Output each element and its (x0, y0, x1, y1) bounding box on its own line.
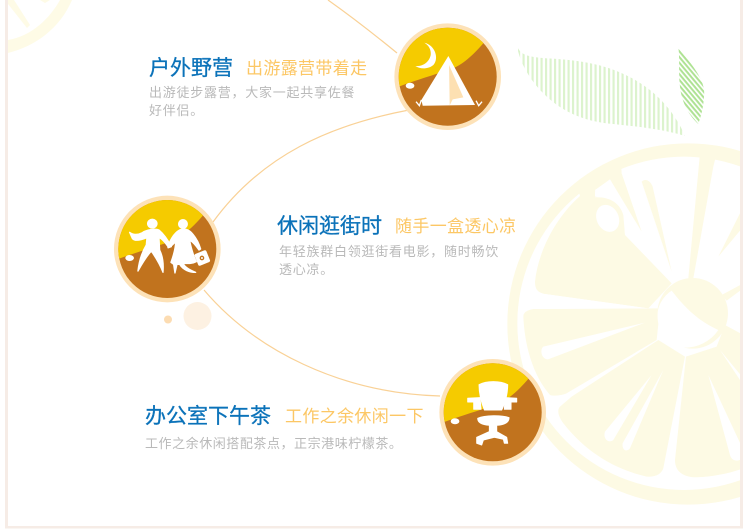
lemon fragment top left (8, 0, 72, 53)
badge: couple walking (113, 189, 223, 302)
description: leisure shopping: 透心凉。 (279, 262, 334, 277)
green striped leaf large (517, 45, 685, 136)
description: outdoor camping: 好伴侣。 (149, 103, 204, 118)
subheading: leisure shopping: 随手一盒透心凉 (395, 217, 516, 236)
description: leisure shopping: 年轻族群白领逛街看电影，随时畅饮 (279, 244, 499, 259)
text block: office tea (145, 404, 424, 451)
description: leisure shopping (279, 244, 499, 277)
icon: man and woman (130, 219, 210, 273)
icon: crescent moon (415, 43, 436, 68)
green striped leaf small (678, 47, 704, 124)
subheading: outdoor camping: 出游露营带着走 (246, 59, 367, 78)
description: outdoor camping: 出游徒步露营，大家一起共享佐餐 (149, 85, 355, 100)
heading: office tea: 办公室下午茶 (145, 405, 271, 428)
text block: outdoor camping (149, 56, 367, 118)
small decorative circles (164, 302, 212, 330)
connector lines (204, 0, 440, 396)
subheading: office tea: 工作之余休闲一下 (285, 407, 424, 426)
icon: chair (468, 382, 517, 445)
text block: leisure shopping (277, 215, 516, 277)
description: office tea: 工作之余休闲搭配茶点，正宗港味柠檬茶。 (145, 436, 402, 451)
badge: camping tent (393, 17, 503, 130)
icon: tent (416, 56, 482, 106)
badge: office chair (438, 352, 548, 466)
heading: outdoor camping: 户外野营 (149, 57, 233, 80)
heading: leisure shopping: 休闲逛街时 (277, 215, 382, 238)
lemon slice background (507, 143, 750, 505)
description: outdoor camping (149, 85, 355, 118)
